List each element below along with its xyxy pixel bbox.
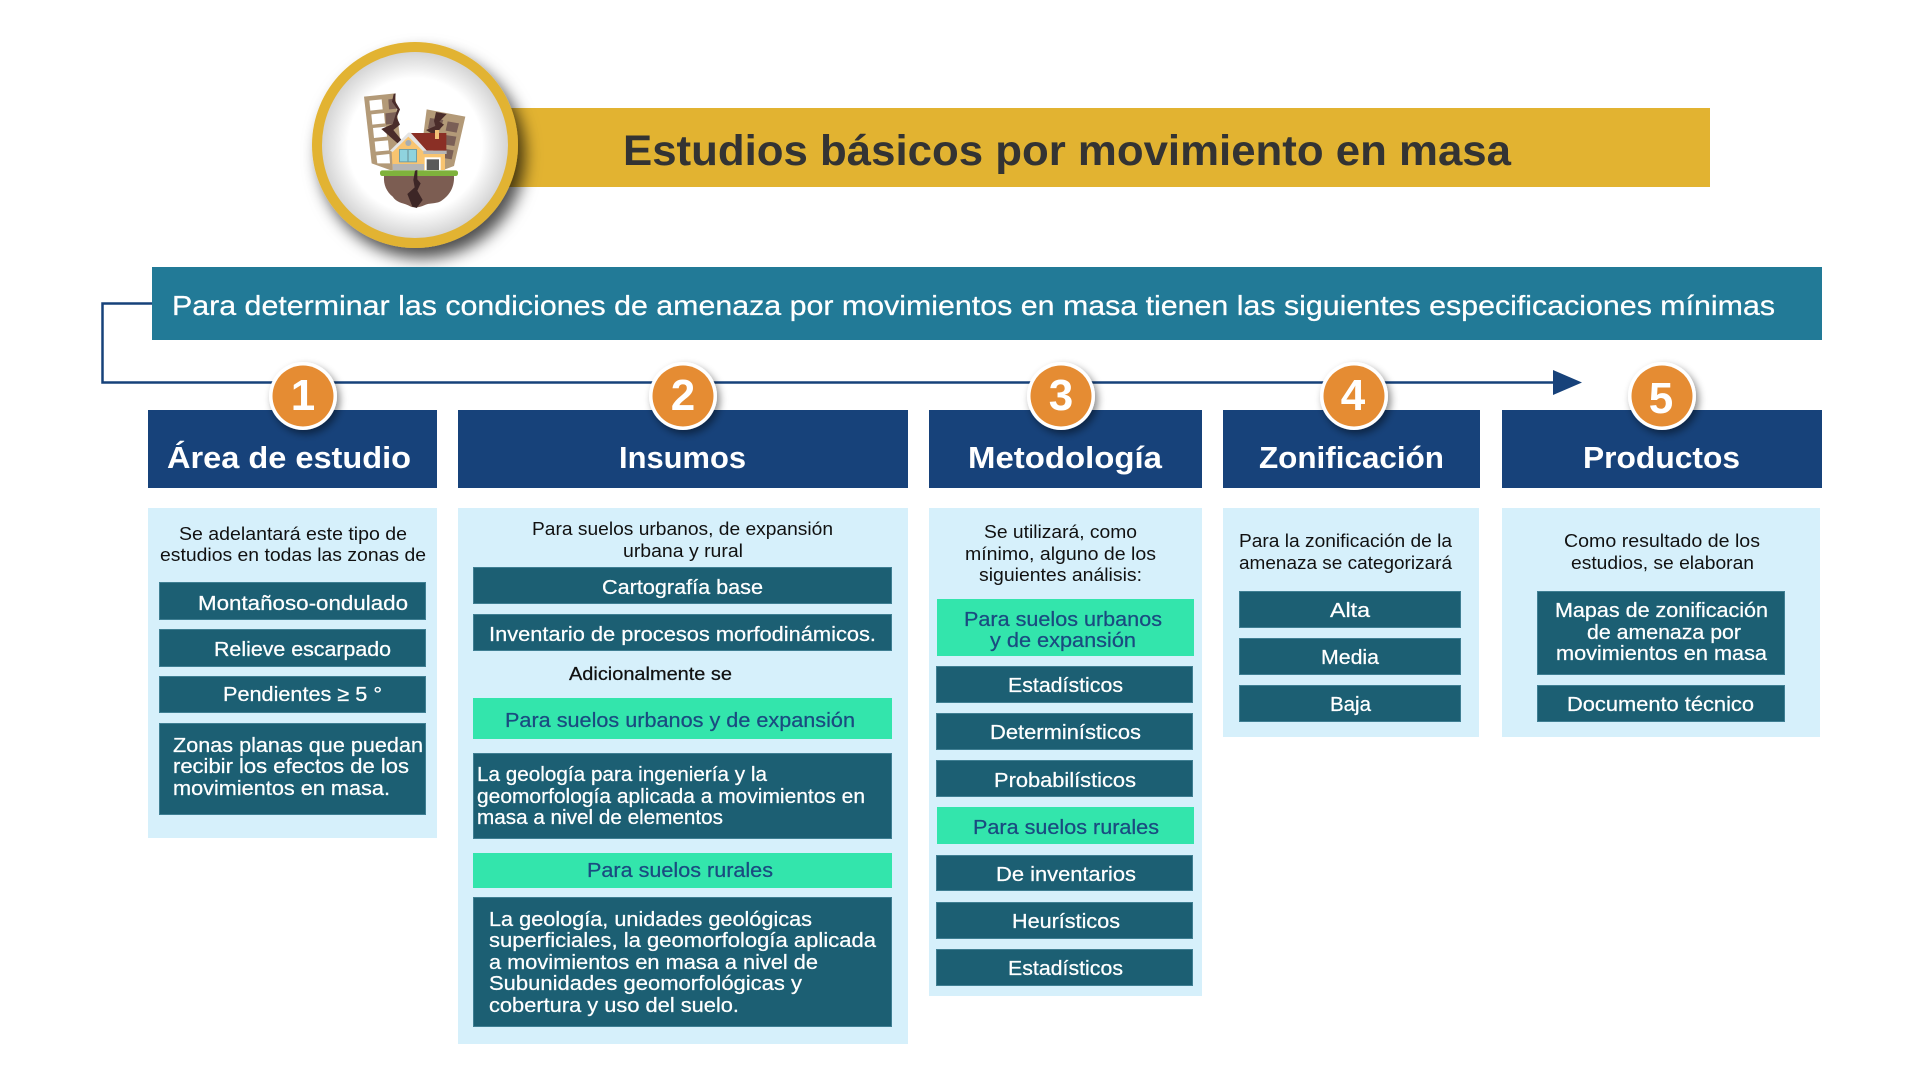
item: relieve	[160, 630, 426, 666]
item: inventario: Inventario de procesos morfodinámicos.	[489, 623, 876, 646]
item: estadisticos	[936, 666, 1192, 702]
header: area de estudio	[148, 410, 437, 488]
item: relieve: Relieve escarpado	[214, 638, 391, 661]
intro text	[532, 518, 833, 561]
panel: productos	[1502, 508, 1820, 737]
item: pendientes	[160, 676, 426, 712]
item: inventario	[474, 614, 892, 650]
header: insumos: Insumos	[619, 440, 746, 475]
title banner	[500, 108, 1710, 187]
panel: metodologia	[929, 508, 1202, 996]
arrow: connector from banner to products	[102, 304, 1582, 395]
item: documento tecnico: Documento técnico	[1567, 693, 1754, 716]
icon: damaged buildings and house on cracked ground	[312, 42, 518, 248]
item: estadisticos rurales	[936, 950, 1192, 986]
item: zonas planas: movimientos en masa.	[173, 777, 390, 800]
item: de inventarios: De inventarios	[996, 863, 1136, 886]
item: baja	[1240, 686, 1460, 722]
intro banner	[152, 267, 1822, 340]
text: adicionalmente: Adicionalmente se	[569, 663, 732, 684]
item: geologia unidades: La geología, unidades geológicas	[489, 908, 812, 931]
intro text: Para la zonificación de la	[1239, 530, 1453, 551]
panel: zonificacion	[1223, 508, 1479, 737]
banner text: Para determinar las condiciones de amenaza por movimientos en masa tienen las siguientes especificaciones mínimas	[172, 290, 1775, 321]
number badge 1: 1	[291, 371, 315, 420]
item: cartografia	[474, 568, 892, 604]
number badge 1	[269, 362, 337, 430]
number badge 2: 2	[671, 371, 695, 420]
item: zonas planas	[160, 724, 426, 814]
item: deterministicos	[936, 714, 1192, 750]
item: cartografia: Cartografía base	[602, 576, 763, 599]
item: heuristicos	[936, 902, 1192, 938]
intro text: Para suelos urbanos, de expansión	[532, 518, 833, 539]
item: alta: Alta	[1330, 599, 1371, 622]
number badge 2	[649, 362, 717, 430]
intro text	[160, 523, 426, 565]
title: Estudios básicos por movimiento en masa	[623, 127, 1512, 175]
item: geologia unidades: a movimientos en masa a nivel de	[489, 951, 818, 974]
item: probabilisticos: Probabilísticos	[994, 769, 1136, 792]
header: metodologia	[929, 410, 1202, 488]
subheading: urbanos	[473, 698, 892, 739]
intro text	[965, 521, 1156, 585]
intro text: urbana y rural	[623, 540, 743, 561]
intro text: amenaza se categorizará	[1239, 552, 1453, 573]
intro text	[1564, 530, 1760, 573]
intro text: Se utilizará, como	[984, 521, 1137, 542]
subheading: urbanos: Para suelos urbanos y de expansión	[505, 709, 855, 732]
intro text: mínimo, alguno de los	[965, 543, 1156, 564]
intro text: estudios en todas las zonas de	[160, 544, 426, 565]
intro text: siguientes análisis:	[979, 564, 1142, 585]
number badge 5: 5	[1649, 374, 1673, 423]
header: productos: Productos	[1583, 440, 1740, 475]
subheading: rurales	[473, 853, 892, 888]
item: geologia para ingenieria: La geología para ingeniería y la	[477, 763, 768, 786]
item: probabilisticos	[936, 760, 1192, 796]
subheading: rurales: Para suelos rurales	[973, 816, 1159, 839]
item: deterministicos: Determinísticos	[990, 721, 1141, 744]
number badge 3	[1027, 362, 1095, 430]
panel: insumos	[458, 508, 908, 1044]
header: metodologia: Metodología	[968, 440, 1163, 475]
header: insumos	[458, 410, 908, 488]
item: mapas: Mapas de zonificación	[1555, 599, 1768, 622]
header: area de estudio: Área de estudio	[167, 440, 411, 475]
intro text	[1239, 530, 1453, 573]
item: baja: Baja	[1330, 693, 1372, 716]
number badge 3: 3	[1049, 371, 1073, 420]
item: geologia para ingenieria: masa a nivel de elementos	[477, 806, 723, 829]
item: montanoso: Montañoso-ondulado	[198, 592, 408, 615]
item: estadisticos: Estadísticos	[1008, 674, 1123, 697]
item: zonas planas: Zonas planas que puedan	[173, 734, 423, 757]
item: mapas	[1538, 592, 1784, 674]
item: documento tecnico	[1538, 686, 1784, 722]
intro text: Se adelantará este tipo de	[179, 523, 407, 544]
header: productos	[1502, 410, 1822, 488]
item: media	[1240, 638, 1460, 674]
header: zonificacion: Zonificación	[1259, 440, 1444, 475]
item: geologia unidades	[474, 898, 892, 1026]
item: pendientes: Pendientes ≥ 5 °	[223, 683, 382, 706]
subheading: urbanos: y de expansión	[990, 629, 1136, 652]
item: media: Media	[1321, 646, 1380, 669]
item: alta	[1240, 592, 1460, 628]
item: geologia unidades: cobertura y uso del suelo.	[489, 994, 739, 1017]
intro text: estudios, se elaboran	[1571, 552, 1754, 573]
item: geologia unidades: Subunidades geomorfológicas y	[489, 972, 803, 995]
panel: area de estudio	[148, 508, 437, 838]
item: heuristicos: Heurísticos	[1012, 910, 1120, 933]
subheading: urbanos: Para suelos urbanos	[964, 608, 1162, 631]
subheading: rurales: Para suelos rurales	[587, 859, 773, 882]
item: de inventarios	[936, 856, 1192, 890]
item: estadisticos rurales: Estadísticos	[1008, 957, 1123, 980]
item: mapas: de amenaza por	[1587, 621, 1741, 644]
subheading: urbanos	[937, 599, 1194, 656]
item: montanoso	[160, 582, 426, 620]
intro text: Como resultado de los	[1564, 530, 1760, 551]
item: geologia para ingenieria	[474, 754, 892, 838]
number badge 5	[1628, 362, 1696, 430]
subheading: rurales	[937, 807, 1194, 844]
number badge 4: 4	[1341, 371, 1366, 420]
number badge 4	[1320, 362, 1388, 430]
item: geologia para ingenieria: geomorfología aplicada a movimientos en	[477, 785, 865, 808]
item: zonas planas: recibir los efectos de los	[173, 755, 409, 778]
header: zonificacion	[1223, 410, 1480, 488]
item: mapas: movimientos en masa	[1556, 642, 1768, 665]
item: geologia unidades: superficiales, la geomorfología aplicada	[489, 929, 877, 952]
